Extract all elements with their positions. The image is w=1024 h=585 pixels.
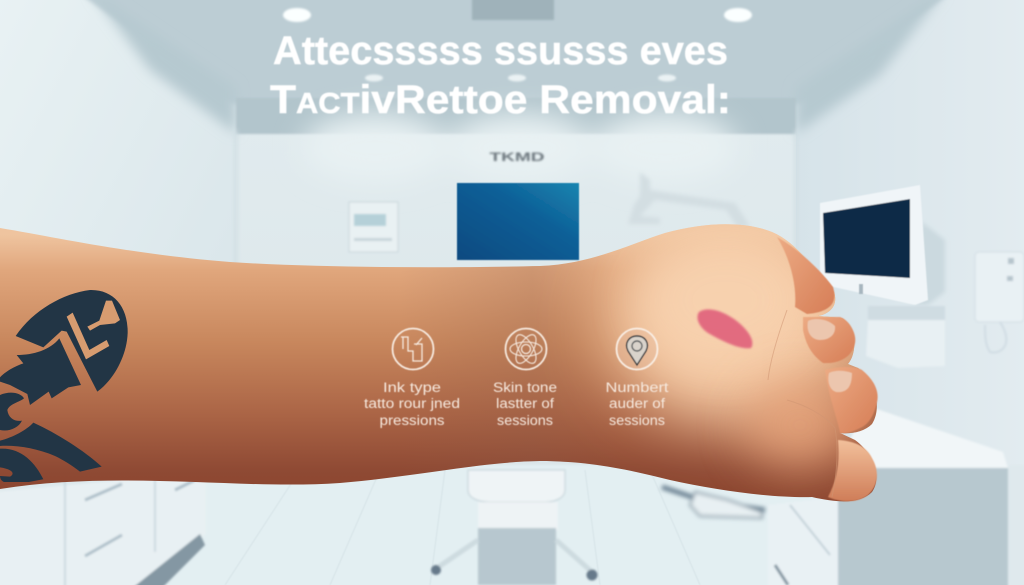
- thumb: [828, 440, 877, 501]
- forearm and hand: [0, 224, 878, 501]
- tattoo L cut-out: [67, 313, 109, 359]
- finger 1: [777, 237, 834, 314]
- tattoo trumpet cut-out: [87, 301, 120, 331]
- label: number of sessions: sessions: [609, 413, 665, 428]
- title line 1: Attecsssss ssusss eves: [273, 29, 728, 73]
- back wall: [230, 120, 800, 470]
- label: skin tone: sessions: [497, 413, 553, 428]
- tattoo feather: [0, 338, 81, 405]
- palm creases: [768, 310, 837, 497]
- factor: skin tone: [493, 328, 557, 428]
- stool right: [662, 487, 765, 518]
- factor: ink type: [364, 328, 460, 428]
- icon: atom: [506, 328, 546, 370]
- tattoo upper oval: [16, 290, 128, 392]
- room corners: [236, 130, 796, 470]
- label: ink type: [364, 380, 460, 428]
- nail 2: [808, 319, 835, 340]
- cabinet left: [0, 472, 206, 585]
- label: skin tone: [493, 380, 557, 428]
- ceiling lights: [283, 8, 752, 82]
- label: skin tone: Skin tone: [493, 380, 557, 395]
- label: ink type: pressions: [380, 413, 445, 428]
- label: ink type: tatto rour jned: [364, 396, 460, 411]
- label: number of sessions: Numbert: [606, 380, 669, 395]
- wall socket device: [975, 252, 1024, 353]
- wall poster: [349, 202, 398, 252]
- left wall: [0, 0, 236, 495]
- label: skin tone: lastter of: [496, 396, 554, 411]
- title: [270, 29, 731, 122]
- wall light glow: [303, 114, 737, 182]
- right wall: [796, 0, 1024, 510]
- tattoo scroll: [0, 393, 24, 431]
- arm shading: [400, 225, 860, 480]
- icon: ink bottle: [392, 328, 434, 370]
- tattoo lower band: [0, 423, 102, 472]
- tattoo lower swirl: [0, 449, 43, 484]
- wall screen: [457, 183, 579, 260]
- label: number of sessions: auder of: [609, 396, 665, 411]
- arm tattoo: [0, 290, 128, 484]
- floor: [60, 465, 860, 585]
- laser arm equipment: [628, 172, 750, 228]
- cabinet right: [768, 405, 1024, 585]
- title line 2: TACTivRettoe Removal:: [270, 78, 731, 122]
- ceiling: [75, 0, 955, 134]
- treatment chair: [431, 470, 598, 585]
- label: ink type: Ink type: [383, 380, 441, 395]
- clinic logo text: TKMD: [490, 150, 545, 164]
- finger 2: [803, 317, 855, 363]
- wall monitor: [820, 185, 945, 305]
- finger 3: [825, 367, 878, 433]
- arm silhouette: [0, 224, 877, 501]
- nail 3: [828, 371, 852, 392]
- monitor stand cabinet: [866, 306, 945, 368]
- factor: number of sessions: [606, 328, 669, 428]
- icon: map pin: [616, 328, 658, 370]
- label: number of sessions: [606, 380, 669, 428]
- redness mark: [697, 309, 752, 348]
- floor tile lines: [225, 470, 700, 585]
